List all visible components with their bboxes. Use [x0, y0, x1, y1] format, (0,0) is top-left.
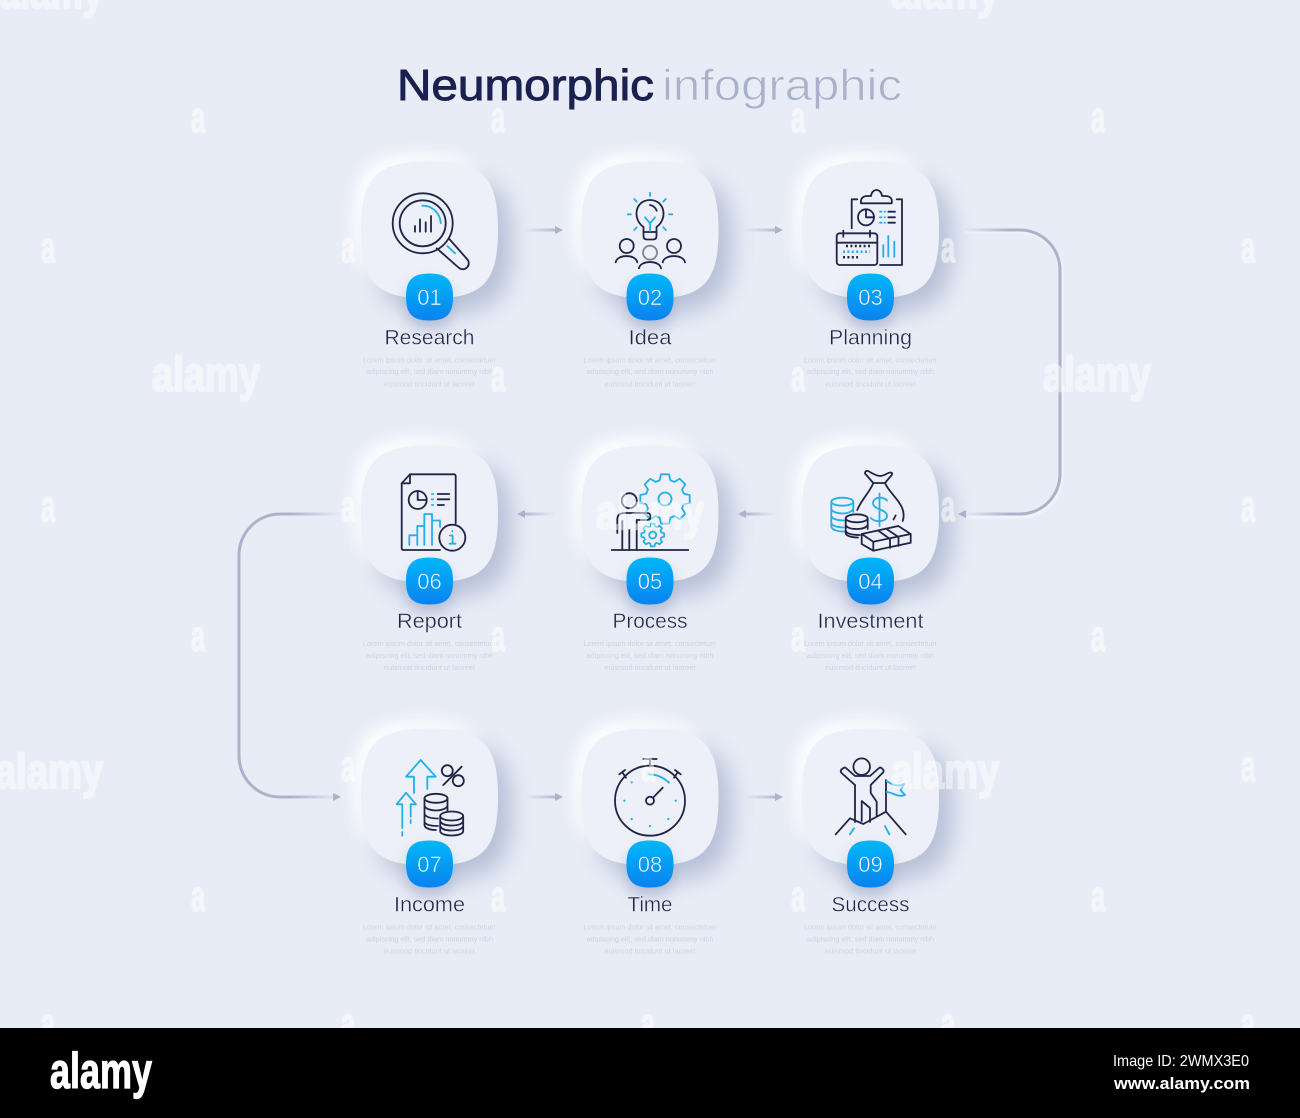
badge: 02	[626, 274, 674, 320]
icon: rising arrows, percent and coins	[397, 760, 464, 836]
text block: Income description: euismod tincidunt ut laoreet	[384, 946, 476, 956]
watermark overlay: a	[941, 999, 955, 1048]
text block: Income description: Lorem ipsum dolor sit amet, consectetuer	[363, 922, 496, 932]
arrow: Investment to Process	[738, 510, 777, 518]
watermark overlay: a	[1091, 612, 1105, 661]
watermark overlay: alamy	[152, 348, 260, 402]
label: Process: Process	[612, 609, 688, 633]
watermark overlay: a	[341, 482, 355, 531]
text block: Time description: adipiscing elit, sed diam nonummy nibh	[586, 934, 714, 944]
text block: Success description	[804, 922, 937, 956]
text block: Success description: adipiscing elit, sed diam nonummy nibh	[807, 934, 934, 944]
arrow: Idea to Planning	[744, 226, 783, 234]
footer logo: alamy: alamy	[50, 1043, 152, 1099]
text block: Investment description	[804, 639, 937, 672]
footer bar	[0, 1028, 1300, 1118]
label: Idea: Idea	[628, 326, 672, 350]
badge: 03: 03	[858, 285, 883, 310]
label: Success: Success	[832, 892, 910, 916]
icon: stopwatch	[615, 759, 685, 836]
badge: 01: 01	[417, 285, 442, 310]
badge: 08: 08	[638, 852, 662, 877]
badge: 08	[626, 840, 674, 888]
text block: Investment description: adipiscing elit, sed diam nonummy nibh	[807, 651, 934, 660]
watermark overlay: a	[791, 352, 805, 401]
watermark overlay: a	[341, 223, 355, 272]
text block: Idea description: adipiscing elit, sed diam nonummy nibh	[586, 367, 714, 376]
text block: Planning description: adipiscing elit, sed diam nonummy nibh	[807, 367, 934, 376]
arrow: curved connector from Report to Income	[239, 514, 341, 801]
label: Time: Time	[628, 892, 672, 916]
watermark overlay: a	[41, 482, 55, 531]
icon: money bag, coins and banknotes	[831, 471, 911, 551]
watermark overlay: a	[1091, 93, 1105, 142]
label: Report: Report	[397, 609, 462, 633]
text block: Income description	[363, 922, 496, 956]
text block: Time description: Lorem ipsum dolor sit amet, consectetuer	[584, 922, 717, 932]
watermark overlay: a	[1241, 223, 1255, 272]
icon: report document	[402, 474, 465, 551]
watermark overlay: a	[341, 742, 355, 791]
text block: Planning description	[804, 356, 937, 388]
panel: step 01 Research	[354, 154, 512, 388]
watermark overlay: a	[791, 93, 805, 142]
watermark overlay: a	[191, 93, 205, 142]
watermark overlay: a	[791, 872, 805, 921]
watermark overlay: a	[491, 872, 505, 921]
text block: Process description: Lorem ipsum dolor sit amet, consectetuer	[584, 639, 717, 648]
watermark overlay: a	[341, 999, 355, 1048]
badge: 04: 04	[858, 569, 883, 594]
badge: 05: 05	[638, 569, 662, 594]
badge: 06: 06	[417, 569, 442, 594]
watermark overlay: alamy	[1043, 348, 1151, 402]
panel: step 05 Process	[574, 438, 732, 672]
badge: 07	[406, 840, 453, 888]
arrow: Process to Report	[517, 510, 556, 518]
badge: 02: 02	[638, 285, 662, 310]
badge: 01	[406, 274, 453, 320]
watermark overlay: a	[491, 93, 505, 142]
watermark overlay: a	[941, 223, 955, 272]
arrow: Time to Success	[744, 793, 783, 801]
icon: lightbulb and team	[616, 193, 685, 268]
label: Income: Income	[394, 892, 465, 916]
text block: Research description: Lorem ipsum dolor sit amet, consectetuer	[363, 356, 496, 364]
watermark overlay: a	[191, 872, 205, 921]
badge: 09: 09	[858, 852, 883, 877]
title: infographic	[662, 61, 902, 110]
panel: step 07 Income	[354, 720, 512, 956]
watermark overlay: a	[191, 612, 205, 661]
text block: Process description: euismod tincidunt ut laoreet	[604, 663, 696, 672]
text block: Planning description: Lorem ipsum dolor sit amet, consectetuer	[804, 356, 937, 364]
watermark overlay: a	[941, 482, 955, 531]
watermark overlay: a	[1241, 482, 1255, 531]
footer website: www.alamy.com	[1113, 1074, 1250, 1093]
text block: Investment description: euismod tincidunt ut laoreet	[825, 663, 917, 672]
panel: step 03 Planning	[794, 154, 952, 388]
watermark overlay: a	[1241, 999, 1255, 1048]
text block: Success description: Lorem ipsum dolor sit amet, consectetuer	[804, 922, 937, 932]
panel: step 02 Idea	[574, 154, 732, 388]
text block: Idea description	[584, 356, 717, 388]
text block: Report description	[363, 639, 496, 672]
icon: clipboard and calendar	[837, 190, 902, 265]
text block: Idea description: Lorem ipsum dolor sit amet, consectetuer	[584, 356, 717, 364]
panel: step 09 Success	[794, 720, 952, 956]
text block: Time description: euismod tincidunt ut laoreet	[604, 946, 696, 956]
text block: Research description: adipiscing elit, sed diam nonummy nibh	[366, 367, 493, 376]
text block: Research description	[363, 356, 496, 388]
watermark overlay: a	[641, 742, 655, 791]
title	[397, 61, 902, 110]
badge: 07: 07	[417, 852, 442, 877]
icon: person on mountain with flag	[836, 758, 906, 834]
text block: Time description	[584, 922, 717, 956]
watermark overlay: alamy	[891, 745, 999, 799]
badge: 05	[626, 558, 674, 604]
watermark overlay: a	[41, 999, 55, 1048]
label: Research: Research	[384, 326, 474, 350]
badge: 06	[406, 558, 453, 604]
watermark overlay: a	[491, 612, 505, 661]
panel: step 06 Report	[354, 438, 512, 672]
panel: step 04 Investment	[794, 438, 952, 672]
text block: Report description: euismod tincidunt ut laoreet	[384, 663, 476, 672]
text block: Planning description: euismod tincidunt ut laoreet	[825, 380, 917, 388]
text block: Income description: adipiscing elit, sed diam nonummy nibh	[366, 934, 493, 944]
arrow: Research to Idea	[524, 226, 563, 234]
watermark overlay: alamy	[596, 486, 704, 540]
arrow: curved connector from Planning to Investment	[958, 230, 1062, 518]
label: Investment: Investment	[818, 609, 924, 633]
text block: Report description: adipiscing elit, sed diam nonummy nibh	[366, 651, 493, 660]
watermark overlay: a	[791, 612, 805, 661]
text block: Process description: adipiscing elit, sed diam nonummy nibh	[586, 651, 714, 660]
arrow: Income to Time	[524, 793, 563, 801]
watermark overlay: a	[41, 223, 55, 272]
watermark overlay: a	[641, 999, 655, 1048]
icon: magnifier with chart	[393, 193, 469, 269]
label: Planning: Planning	[829, 326, 912, 350]
badge: 04	[847, 558, 894, 604]
watermark overlay: a	[491, 352, 505, 401]
title: Neumorphic	[397, 61, 654, 110]
text block: Idea description: euismod tincidunt ut laoreet	[604, 380, 696, 388]
text block: Process description	[584, 639, 717, 672]
panel: step 08 Time	[574, 720, 732, 956]
text block: Research description: euismod tincidunt ut laoreet	[384, 380, 476, 388]
badge: 09	[847, 840, 894, 888]
icon: person with gears	[612, 474, 690, 550]
text block: Report description: Lorem ipsum dolor sit amet, consectetuer	[363, 639, 496, 648]
badge: 03	[847, 274, 894, 320]
text block: Success description: euismod tincidunt ut laoreet	[825, 946, 917, 956]
watermark overlay: a	[1241, 742, 1255, 791]
text block: Investment description: Lorem ipsum dolor sit amet, consectetuer	[804, 639, 937, 648]
footer image id: Image ID: 2WMX3E0	[1113, 1053, 1249, 1070]
watermark overlay: a	[1091, 872, 1105, 921]
